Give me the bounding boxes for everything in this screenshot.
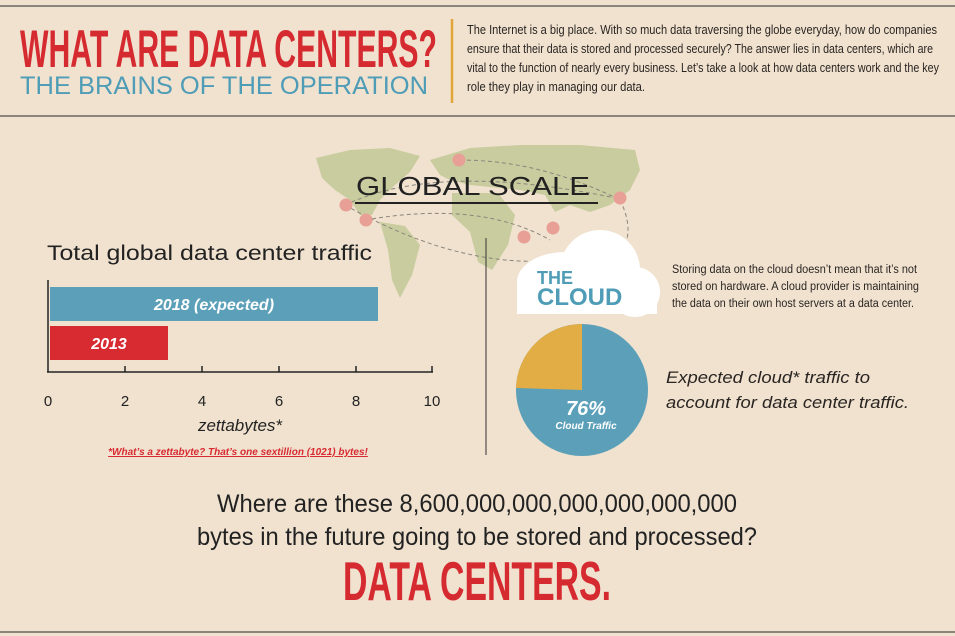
- pie caption: account for data center traffic.: [666, 393, 909, 412]
- pie chart: cloud traffic: [516, 324, 648, 456]
- pie chart: cloud traffic: 76%: [566, 398, 606, 420]
- intro paragraph: role they play in managing our data.: [467, 80, 645, 94]
- cloud label: CLOUD: [537, 284, 622, 311]
- pie caption: [666, 368, 909, 412]
- chart: total global data center traffic: *What’s a zettabyte? That’s one sextillion (1021) bytes!: [108, 447, 369, 458]
- chart: total global data center traffic: Total global data center traffic: [47, 242, 372, 265]
- accent divider: [451, 19, 453, 103]
- cloud paragraph: Storing data on the cloud doesn’t mean that it’s not: [672, 264, 918, 276]
- cloud label: [537, 268, 622, 311]
- question text: bytes in the future going to be stored and processed?: [197, 523, 757, 551]
- location pins: [340, 154, 626, 269]
- flight paths: [345, 160, 628, 265]
- heading: global scale: GLOBAL SCALE: [356, 171, 590, 201]
- cloud paragraph: [672, 264, 919, 310]
- cloud paragraph: stored on hardware. A cloud provider is maintaining: [672, 281, 919, 293]
- chart: total global data center traffic: 8: [352, 393, 360, 410]
- chart: total global data center traffic: 0: [44, 393, 52, 410]
- chart: total global data center traffic: [44, 242, 440, 458]
- chart: total global data center traffic: 4: [198, 393, 206, 410]
- chart: total global data center traffic: zettabytes*: [197, 416, 283, 435]
- cloud paragraph: the data on their own host servers at a data center.: [672, 298, 914, 310]
- title: WHAT ARE DATA CENTERS?: [20, 20, 437, 79]
- chart: total global data center traffic: 2018 (expected): [153, 297, 274, 314]
- intro paragraph: [467, 23, 940, 94]
- center divider: [485, 238, 487, 455]
- answer: data centers: DATA CENTERS.: [343, 550, 611, 612]
- chart: total global data center traffic: 2: [121, 393, 129, 410]
- cloud label: THE: [537, 268, 573, 288]
- subtitle: THE BRAINS OF THE OPERATION: [20, 72, 428, 100]
- question text: Where are these 8,600,000,000,000,000,000,000: [217, 490, 737, 518]
- chart: total global data center traffic: 2013: [90, 336, 127, 353]
- chart: total global data center traffic: 6: [275, 393, 283, 410]
- icon: cloud: [517, 230, 660, 317]
- pie chart: cloud traffic: Cloud Traffic: [555, 421, 617, 432]
- question text: [197, 490, 757, 551]
- pie caption: Expected cloud* traffic to: [666, 368, 870, 387]
- world map: [316, 145, 640, 298]
- chart: total global data center traffic: 10: [424, 393, 440, 410]
